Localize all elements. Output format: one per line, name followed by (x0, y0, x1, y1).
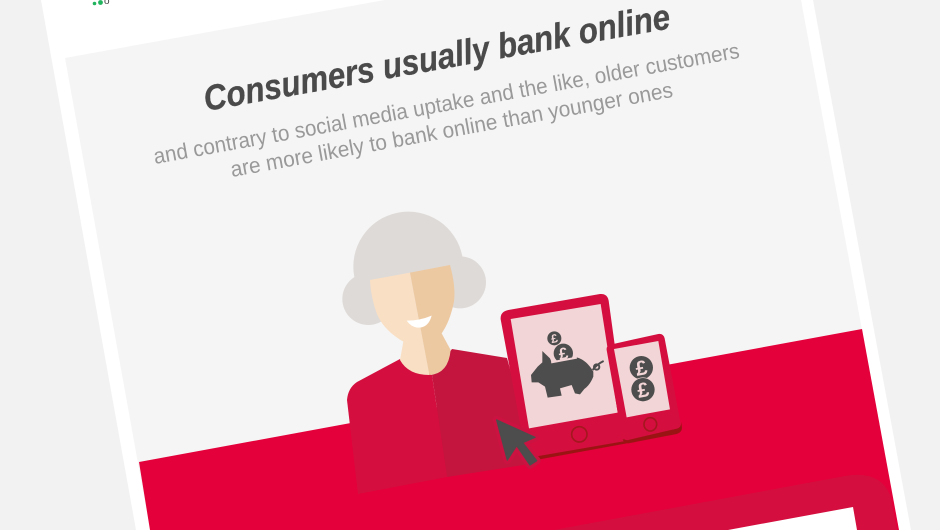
coins on phone: £ (635, 378, 651, 403)
red band (139, 329, 899, 530)
body (347, 349, 536, 494)
piggy bank with coins: £ (550, 331, 559, 346)
face and neck, shaded side (410, 265, 454, 375)
face and neck, light side (370, 273, 429, 375)
head and hair (342, 212, 486, 375)
devices (497, 294, 682, 465)
cursor arrow (497, 420, 537, 465)
phone (607, 334, 682, 443)
piggy bank with coins (531, 331, 604, 398)
tablet frame at bottom (554, 475, 897, 530)
logo fragment (93, 0, 110, 7)
subtitle: are more likely to bank online than younger ones (228, 77, 675, 182)
coins on phone: £ (634, 356, 650, 381)
tablet (501, 294, 627, 459)
person (342, 212, 536, 494)
coins on phone (630, 356, 655, 403)
subtitle: and contrary to social media uptake and the like, older customers (151, 38, 741, 169)
smile (407, 316, 432, 328)
piggy bank with coins: £ (557, 344, 570, 364)
